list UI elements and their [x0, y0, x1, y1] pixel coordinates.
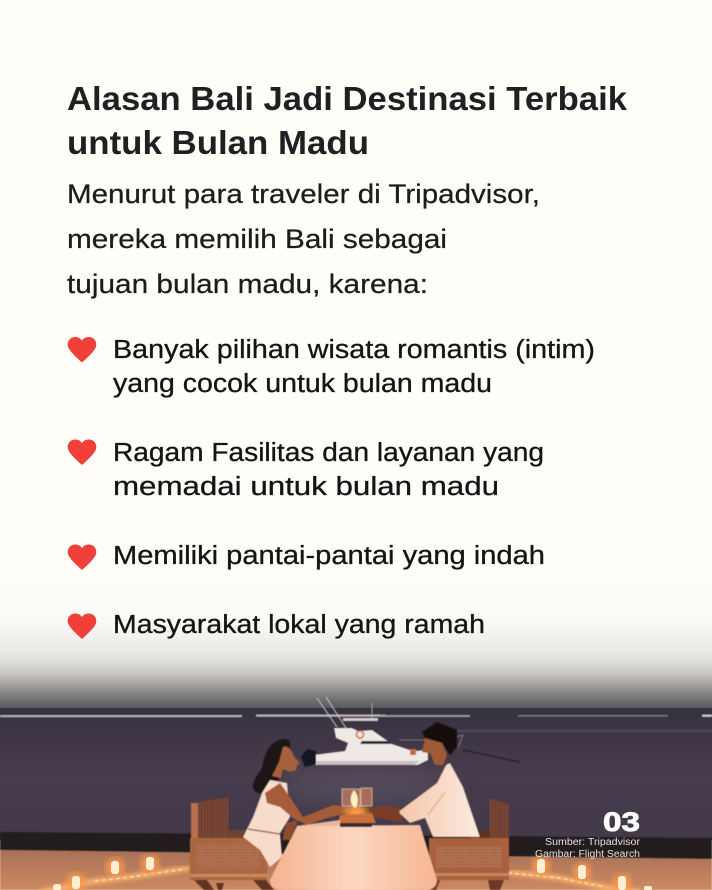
- reason list: [68, 336, 595, 639]
- man: [357, 722, 480, 837]
- reason 4 text: Masyarakat lokal yang ramah: [113, 611, 485, 639]
- dinner table: [270, 788, 437, 890]
- woman: [243, 739, 350, 867]
- reason 4: [68, 611, 485, 639]
- icon: heart: [68, 440, 96, 465]
- photo: romantic beach dinner: [0, 570, 712, 890]
- reason 1 text: [113, 336, 595, 398]
- right chair: [429, 798, 509, 890]
- icon: heart: [68, 337, 96, 362]
- title: Alasan Bali Jadi Destinasi Terbaik: [67, 80, 628, 117]
- reason 2 text: Ragam Fasilitas dan layanan yang: [113, 439, 544, 467]
- page number: 03: [603, 807, 640, 837]
- candle trail left: [40, 855, 190, 890]
- reason 2 text: [113, 439, 544, 501]
- boat: [301, 697, 520, 767]
- icon: heart: [68, 545, 96, 570]
- title: untuk Bulan Madu: [67, 124, 369, 161]
- sea: [0, 708, 712, 840]
- source credits: Sumber: Tripadvisor: [545, 837, 641, 848]
- icon: heart: [68, 614, 96, 639]
- shore: [0, 832, 712, 890]
- left chair: [190, 797, 274, 890]
- reason 3 text: Memiliki pantai-pantai yang indah: [113, 542, 545, 570]
- source credits: Gambar: Flight Search: [535, 849, 640, 860]
- reason 1 text: Banyak pilihan wisata romantis (intim): [113, 336, 595, 364]
- reason 1 text: yang cocok untuk bulan madu: [113, 370, 492, 398]
- reason 3: [68, 542, 545, 570]
- sky fade: [0, 570, 712, 710]
- candle trail right: [508, 857, 652, 890]
- title: [67, 80, 628, 161]
- intro text: tujuan bulan madu, karena:: [67, 269, 428, 299]
- source credits: [535, 837, 641, 860]
- reason 1: [68, 336, 595, 398]
- intro text: mereka memilih Bali sebagai: [67, 224, 447, 254]
- intro text: [67, 179, 540, 299]
- reason 2: [68, 439, 544, 501]
- intro text: Menurut para traveler di Tripadvisor,: [67, 179, 540, 209]
- reason 2 text: memadai untuk bulan madu: [113, 473, 499, 501]
